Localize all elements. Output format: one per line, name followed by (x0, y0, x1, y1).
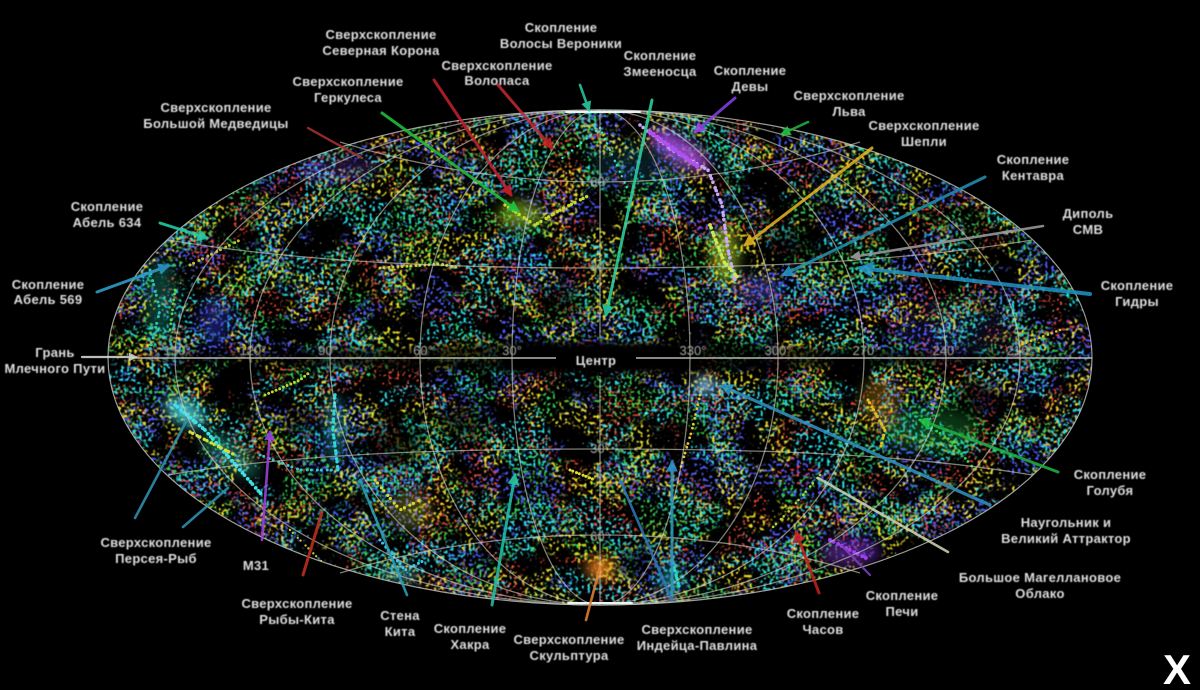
label: Змееносец (623, 48, 697, 79)
longitude and latitude labels: 240° (933, 343, 959, 358)
label: Лев: Льва (832, 104, 866, 119)
label: Абель 569: Абель 569 (14, 292, 82, 307)
label: Печи (866, 588, 938, 619)
label: Индейца-Павлина: Сверхскопление (641, 622, 753, 637)
arrow: Змееносец (606, 100, 652, 315)
label: Наугольник и Великий Аттрактор: Наугольник и (1021, 515, 1111, 530)
label: Северная Корона (322, 27, 440, 58)
longitude and latitude labels: 270° (853, 343, 879, 358)
Milky Way zone of avoidance (108, 342, 1092, 373)
label: Большая Медведица (143, 100, 289, 131)
label: Волопас (441, 58, 553, 88)
label: Шепли: Шепли (901, 134, 947, 149)
longitude and latitude labels: 60° (590, 529, 610, 544)
label: Рыбы-Кита (241, 596, 353, 627)
label: Гидра (1101, 278, 1173, 309)
label: Скульптура (513, 632, 625, 663)
label: Большое Магелланово Облако: Большое Магеллановое (959, 570, 1121, 585)
label: Персей-Рыб: Персея-Рыб (115, 551, 197, 566)
longitude and latitude labels: 30° (590, 259, 610, 274)
label: Дева: Девы (732, 79, 768, 94)
arrow: Гидра (860, 268, 1090, 294)
coordinate grid (168, 110, 1032, 605)
label: Абель 634: Скопление (71, 199, 143, 214)
label: Скульптура: Сверхскопление (513, 632, 625, 647)
arrow: Лев (782, 122, 808, 134)
arrow: Кентавр (783, 177, 985, 275)
label: Диполь CMB (1063, 206, 1113, 237)
label: Рыбы-Кита: Рыбы-Кита (259, 612, 335, 627)
longitude and latitude labels: 330° (680, 343, 706, 358)
arrow: Персей-Рыб 1 (135, 420, 187, 518)
label: Шепли (868, 118, 980, 149)
label: Часы: Скопление (787, 606, 859, 621)
arrow: Северная Корона (434, 80, 511, 195)
label: Большая Медведица: Сверхскопление (160, 100, 272, 115)
arrow: Рыбы-Кита (303, 512, 322, 575)
label: Гидра: Гидры (1115, 294, 1159, 309)
label: Наугольник и Великий Аттрактор (1001, 515, 1131, 546)
longitude and latitude labels: 300° (765, 343, 791, 358)
label: Наугольник и Великий Аттрактор: Великий Аттрактор (1001, 531, 1131, 546)
label: Диполь CMB: CMB (1073, 222, 1103, 237)
label: M31: M31 (243, 558, 269, 573)
arrow: Индейца-Павлина 2 (620, 480, 672, 600)
label: Волосы Вероники: Волосы Вероники (500, 36, 622, 51)
label: Лев (793, 88, 905, 119)
arrow: Волопас (498, 85, 552, 148)
label: Змееносец: Скопление (624, 48, 696, 63)
label: Хакра (434, 621, 506, 652)
label: Голубь (1074, 467, 1146, 498)
label: Дева: Скопление (714, 63, 786, 78)
pole glow (566, 112, 640, 603)
label: Геркулес: Геркулеса (314, 90, 382, 105)
label: Северная Корона: Северная Корона (322, 43, 440, 58)
bright galaxy clusters (144, 122, 1010, 594)
longitude and latitude labels: 60° (413, 343, 433, 358)
label: Абель 569 (12, 277, 84, 307)
arrow: Персей-Рыб 2 (183, 488, 228, 527)
map outline (108, 110, 1092, 605)
label: Большая Медведица: Большой Медведицы (143, 116, 289, 131)
label: Скульптура: Скульптура (530, 648, 609, 663)
label: Рыбы-Кита: Сверхскопление (241, 596, 353, 611)
label: Часы (787, 606, 859, 637)
sky map: all-sky ellipse (100, 100, 1100, 620)
longitude and latitude labels: 30° (502, 343, 522, 358)
arrow: Часы (796, 532, 819, 593)
arrow: Голубь (920, 420, 1058, 472)
longitude and latitude labels: 120° (240, 343, 266, 358)
label: Голубь: Голубя (1087, 483, 1133, 498)
arrow: Скульптура (586, 567, 600, 620)
arrow: Геркулес (382, 113, 518, 211)
label: Лев: Сверхскопление (793, 88, 905, 103)
arrow: Шепли (745, 148, 872, 245)
arrow: Стена Кита (360, 480, 407, 595)
label: Персей-Рыб: Сверхскопление (100, 535, 212, 550)
label: Стена Кита (380, 608, 420, 639)
arrow: Абель 634 (160, 223, 207, 238)
label: Голубь: Скопление (1074, 467, 1146, 482)
arrow: Диполь CMB (852, 226, 1043, 257)
arrow: Хакра (492, 475, 515, 605)
label: Большое Магелланово Облако: Облако (1015, 586, 1065, 601)
longitude and latitude labels: 60° (590, 174, 610, 189)
cosmic voids (280, 231, 1004, 574)
label: Индейца-Павлина (637, 622, 758, 653)
arrow: Наугольник и Великий Аттрактор (722, 386, 990, 505)
label: Абель 634: Абель 634 (73, 215, 142, 230)
label: Шепли: Сверхскопление (868, 118, 980, 133)
label: Грань Млечного Пути: Млечного Пути (5, 361, 105, 376)
label: Абель 569: Скопление (12, 277, 84, 292)
label: Диполь CMB: Диполь (1063, 206, 1113, 221)
longitude and latitude labels: 150° (164, 343, 190, 358)
label: Змееносец: Змееносца (623, 64, 697, 79)
label: Большое Магелланово Облако (959, 570, 1121, 601)
arrow: Волосы Вероники (580, 85, 589, 110)
arrows (82, 80, 1090, 620)
label: Персей-Рыб (100, 535, 212, 566)
label: Кентавр (997, 152, 1069, 183)
arrow: Печи (842, 546, 870, 575)
arrow: Грань Млечного Пути (82, 356, 136, 358)
label: Печи: Скопление (866, 588, 938, 603)
label: Дева (714, 63, 786, 94)
arrow: M31 (262, 432, 270, 540)
label: Хакра: Хакра (450, 637, 490, 652)
label: Стена Кита: Стена (380, 608, 420, 623)
label: Волопас: Сверхскопление (441, 58, 553, 73)
label: Северная Корона: Сверхскопление (325, 27, 437, 42)
label: Центр: Центр (576, 353, 616, 368)
label: Печи: Печи (886, 604, 918, 619)
label: Волопас: Волопаса (464, 73, 530, 88)
arrow: Большая Медведица (308, 128, 362, 158)
label: Хакра: Скопление (434, 621, 506, 636)
longitude and latitude labels: 90° (318, 343, 338, 358)
label: Кентавр: Скопление (997, 152, 1069, 167)
label: Грань Млечного Пути: Грань (35, 345, 75, 360)
label: Геркулес: Сверхскопление (292, 74, 404, 89)
label: Грань Млечного Пути (5, 345, 105, 376)
longitude and latitude labels: 210° (1007, 343, 1033, 358)
label: Волосы Вероники (500, 20, 622, 51)
label: Кентавр: Кентавра (1002, 168, 1065, 183)
equator axis (132, 357, 1092, 359)
label: Гидра: Скопление (1101, 278, 1173, 293)
label: Геркулес (292, 74, 404, 105)
longitude and latitude labels (164, 174, 1033, 544)
label: Абель 634 (71, 199, 143, 230)
arrow: Индейца-Павлина 1 (670, 462, 674, 600)
arrow: Абель 569 (97, 266, 168, 292)
longitude and latitude labels: 30° (590, 441, 610, 456)
arrow: Большое Магелланово Облако (818, 478, 948, 552)
label: Часы: Часов (802, 622, 844, 637)
label: Стена Кита: Кита (385, 624, 416, 639)
arrow: Дева (695, 98, 735, 132)
label: Волосы Вероники: Скопление (525, 20, 597, 35)
galaxy speckle field (100, 100, 1100, 620)
label: Индейца-Павлина: Индейца-Павлина (637, 638, 758, 653)
galaxy filaments (150, 125, 1060, 590)
